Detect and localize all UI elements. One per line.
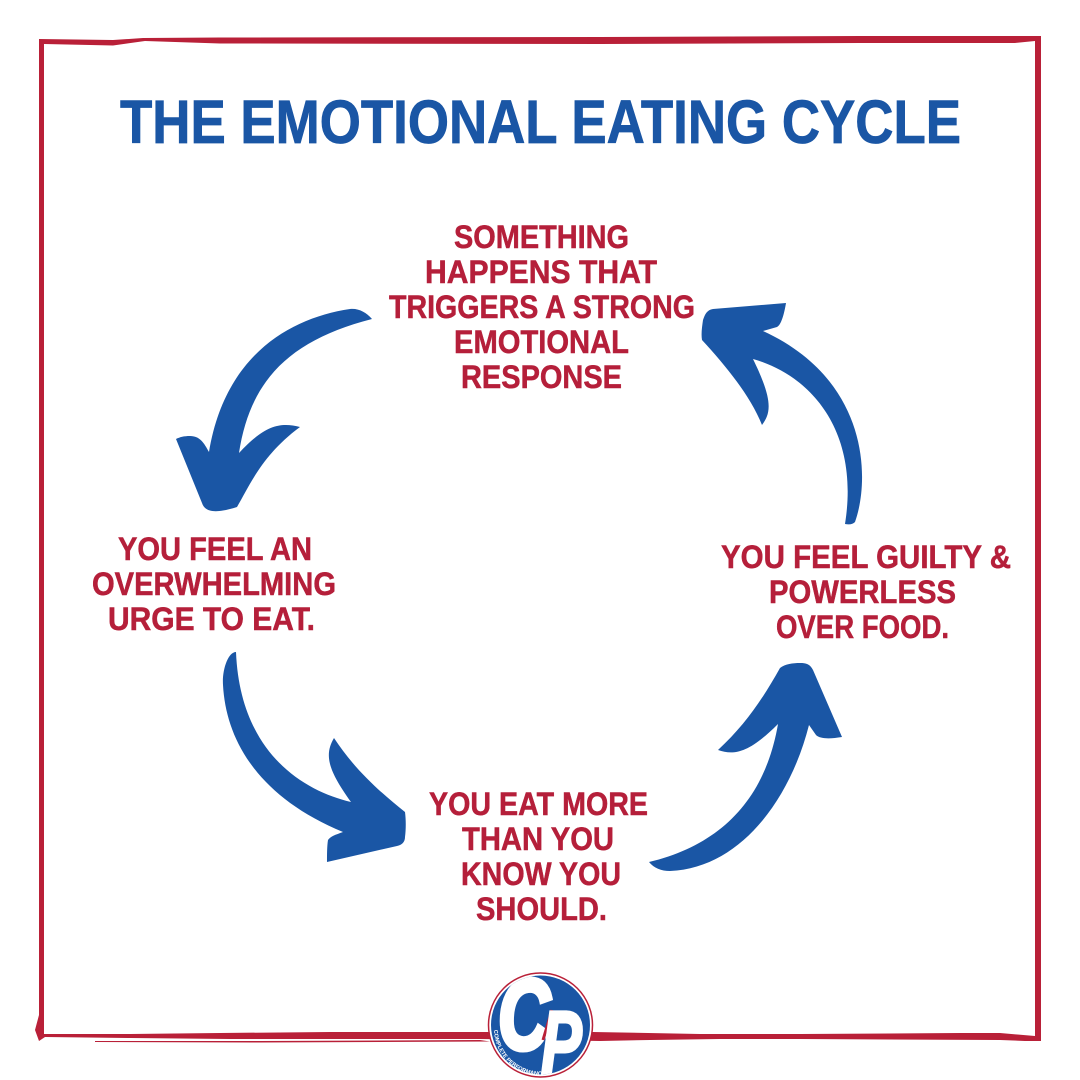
logo: Complete Performance: C xyxy=(498,959,551,1071)
step text: guilty: POWERLESS xyxy=(769,574,956,610)
arrow: eating to guilt xyxy=(649,663,842,871)
step text: trigger: SOMETHING xyxy=(454,219,629,255)
step text: urge to eat xyxy=(92,531,336,637)
step text: eat more: SHOULD. xyxy=(476,891,607,927)
step text: trigger: RESPONSE xyxy=(461,359,622,395)
step text: guilty: YOU FEEL GUILTY & xyxy=(721,539,1011,575)
step text: trigger: TRIGGERS A STRONG xyxy=(389,289,695,325)
step text: trigger: EMOTIONAL xyxy=(454,324,629,360)
logo: Complete Performance: COMPLETE PERFORMANCE xyxy=(494,1030,543,1074)
step text: eat more: YOU EAT MORE xyxy=(429,786,648,822)
step text: eat more: KNOW YOU xyxy=(461,856,621,892)
step text: urge to eat: URGE TO EAT. xyxy=(108,601,315,637)
arrow: guilt to trigger xyxy=(702,303,862,524)
step text: eat more: THAN YOU xyxy=(462,821,614,857)
arrow: urge to eating xyxy=(223,652,406,862)
step text: guilty: OVER FOOD. xyxy=(776,609,949,645)
step text: trigger xyxy=(389,219,695,395)
step text: eat more xyxy=(429,786,648,927)
step text: guilty xyxy=(721,539,1011,645)
arrow: trigger to urge xyxy=(176,309,372,511)
step text: trigger: HAPPENS THAT xyxy=(425,254,657,290)
logo: Complete Performance xyxy=(488,972,594,1078)
step text: urge to eat: OVERWHELMING xyxy=(92,566,336,602)
title: THE EMOTIONAL EATING CYCLE xyxy=(120,88,961,156)
step text: urge to eat: YOU FEEL AN xyxy=(118,531,312,567)
